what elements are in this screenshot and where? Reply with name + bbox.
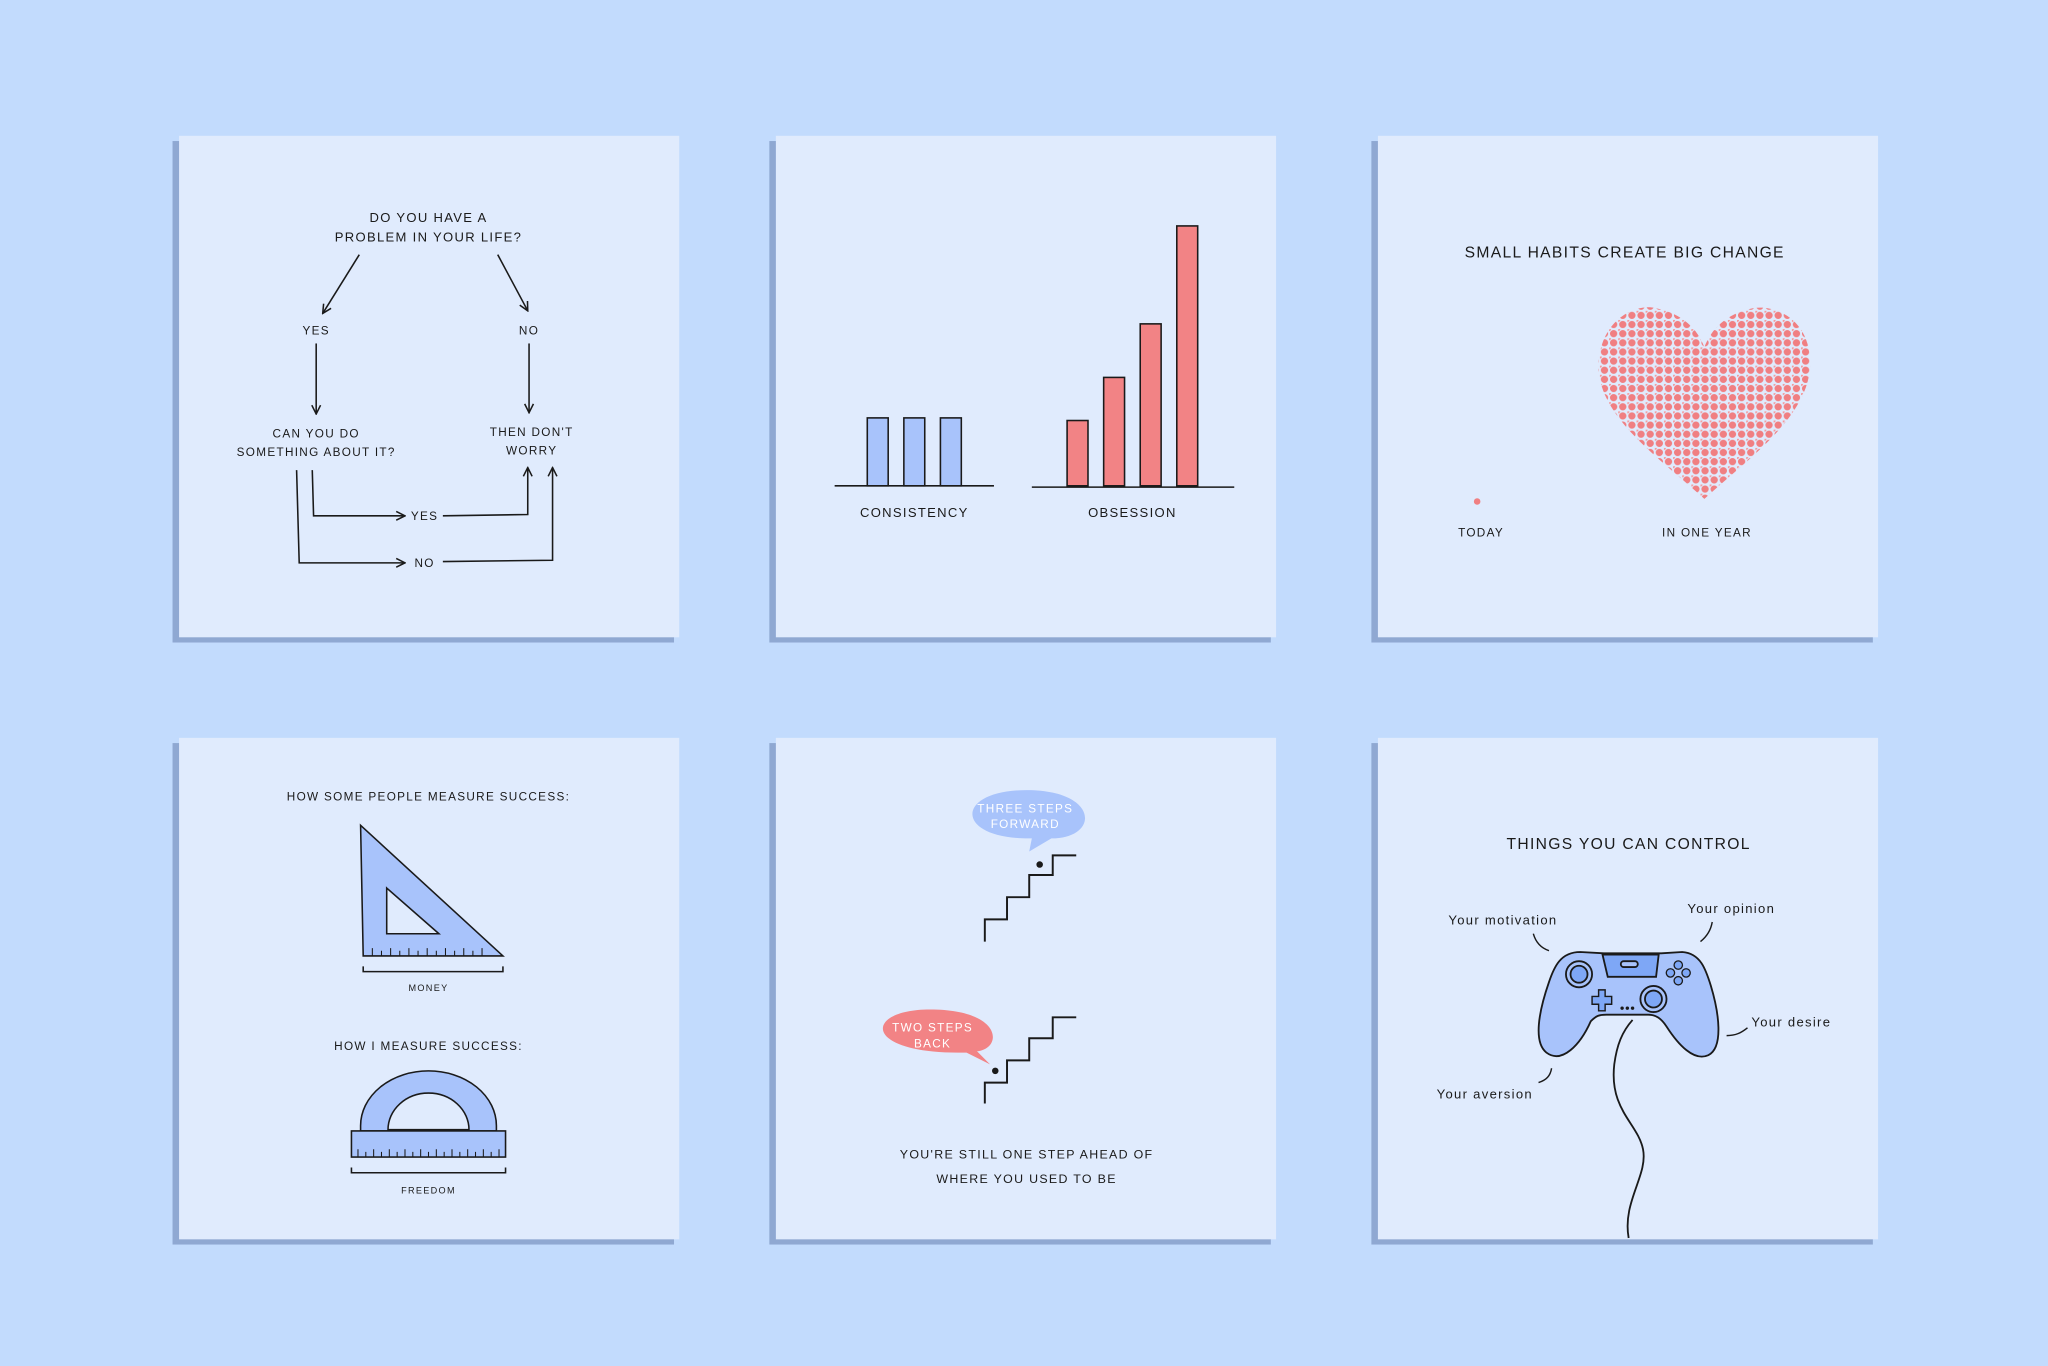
labels: controller: Your desire (1751, 1014, 1831, 1029)
chart labels: CONSISTENCY (860, 505, 969, 520)
flowchart labels: NO (519, 324, 539, 337)
panel: flowchart (173, 136, 679, 643)
chart labels: OBSESSION (1088, 505, 1177, 520)
flowchart labels: THEN DON'T (490, 426, 574, 439)
icon: single dot today (1474, 498, 1480, 505)
text: still ahead (900, 1147, 1153, 1186)
labels: today / in one year (1458, 527, 1752, 540)
panel: small habits (1371, 136, 1878, 643)
callout lines (1533, 922, 1747, 1083)
chart: obsession bars (1032, 226, 1234, 487)
heading: flowchart question: PROBLEM IN YOUR LIFE? (335, 230, 522, 245)
chart: consistency bars (835, 418, 994, 486)
callout: three steps forward: FORWARD (991, 818, 1060, 831)
heading: how i measure: HOW I MEASURE SUCCESS: (334, 1040, 523, 1053)
icon: protractor (351, 1071, 506, 1173)
text: still ahead: YOU'RE STILL ONE STEP AHEAD OF (900, 1147, 1153, 1161)
heading: control: THINGS YOU CAN CONTROL (1507, 836, 1751, 853)
heading: flowchart question (335, 210, 522, 245)
flowchart labels: YES (411, 510, 438, 523)
labels: controller: Your aversion (1437, 1086, 1533, 1101)
labels: today / in one year: IN ONE YEAR (1662, 527, 1752, 540)
icon: stairs back (985, 1017, 1076, 1104)
icon: set square (361, 825, 503, 972)
labels: controller: Your opinion (1687, 901, 1775, 916)
panel: consistency vs obsession (769, 136, 1276, 643)
icon: dotted heart (1599, 307, 1810, 499)
callout: two steps back: TWO STEPS (892, 1022, 973, 1035)
flowchart labels: WORRY (506, 444, 557, 457)
text: still ahead: WHERE YOU USED TO BE (936, 1172, 1117, 1186)
flowchart labels (237, 324, 574, 570)
flowchart arrows (297, 255, 553, 563)
flowchart labels: YES (302, 324, 330, 337)
heading: flowchart question: DO YOU HAVE A (369, 210, 488, 225)
panel: steps (769, 738, 1276, 1245)
labels: controller (1437, 901, 1831, 1101)
icon: game controller (1539, 952, 1718, 1238)
labels: controller: Your motivation (1448, 913, 1557, 928)
panel: measure success (173, 738, 679, 1245)
heading: some people: HOW SOME PEOPLE MEASURE SUCCESS: (287, 791, 570, 804)
flowchart labels: NO (414, 557, 435, 570)
flowchart labels: SOMETHING ABOUT IT? (237, 446, 396, 459)
heading: small habits: SMALL HABITS CREATE BIG CHANGE (1465, 244, 1785, 261)
panel: measure success: MONEY (408, 983, 448, 993)
callout: three steps forward (972, 790, 1085, 851)
callout: two steps back: BACK (914, 1037, 951, 1050)
chart labels (860, 505, 1177, 520)
panel: things you can control (1371, 738, 1878, 1245)
panel: measure success: FREEDOM (401, 1186, 456, 1196)
callout: three steps forward: THREE STEPS (977, 802, 1073, 815)
flowchart labels: CAN YOU DO (273, 427, 360, 440)
icon: stairs up (985, 855, 1076, 942)
callout: two steps back (883, 1009, 993, 1064)
labels: today / in one year: TODAY (1458, 527, 1504, 540)
